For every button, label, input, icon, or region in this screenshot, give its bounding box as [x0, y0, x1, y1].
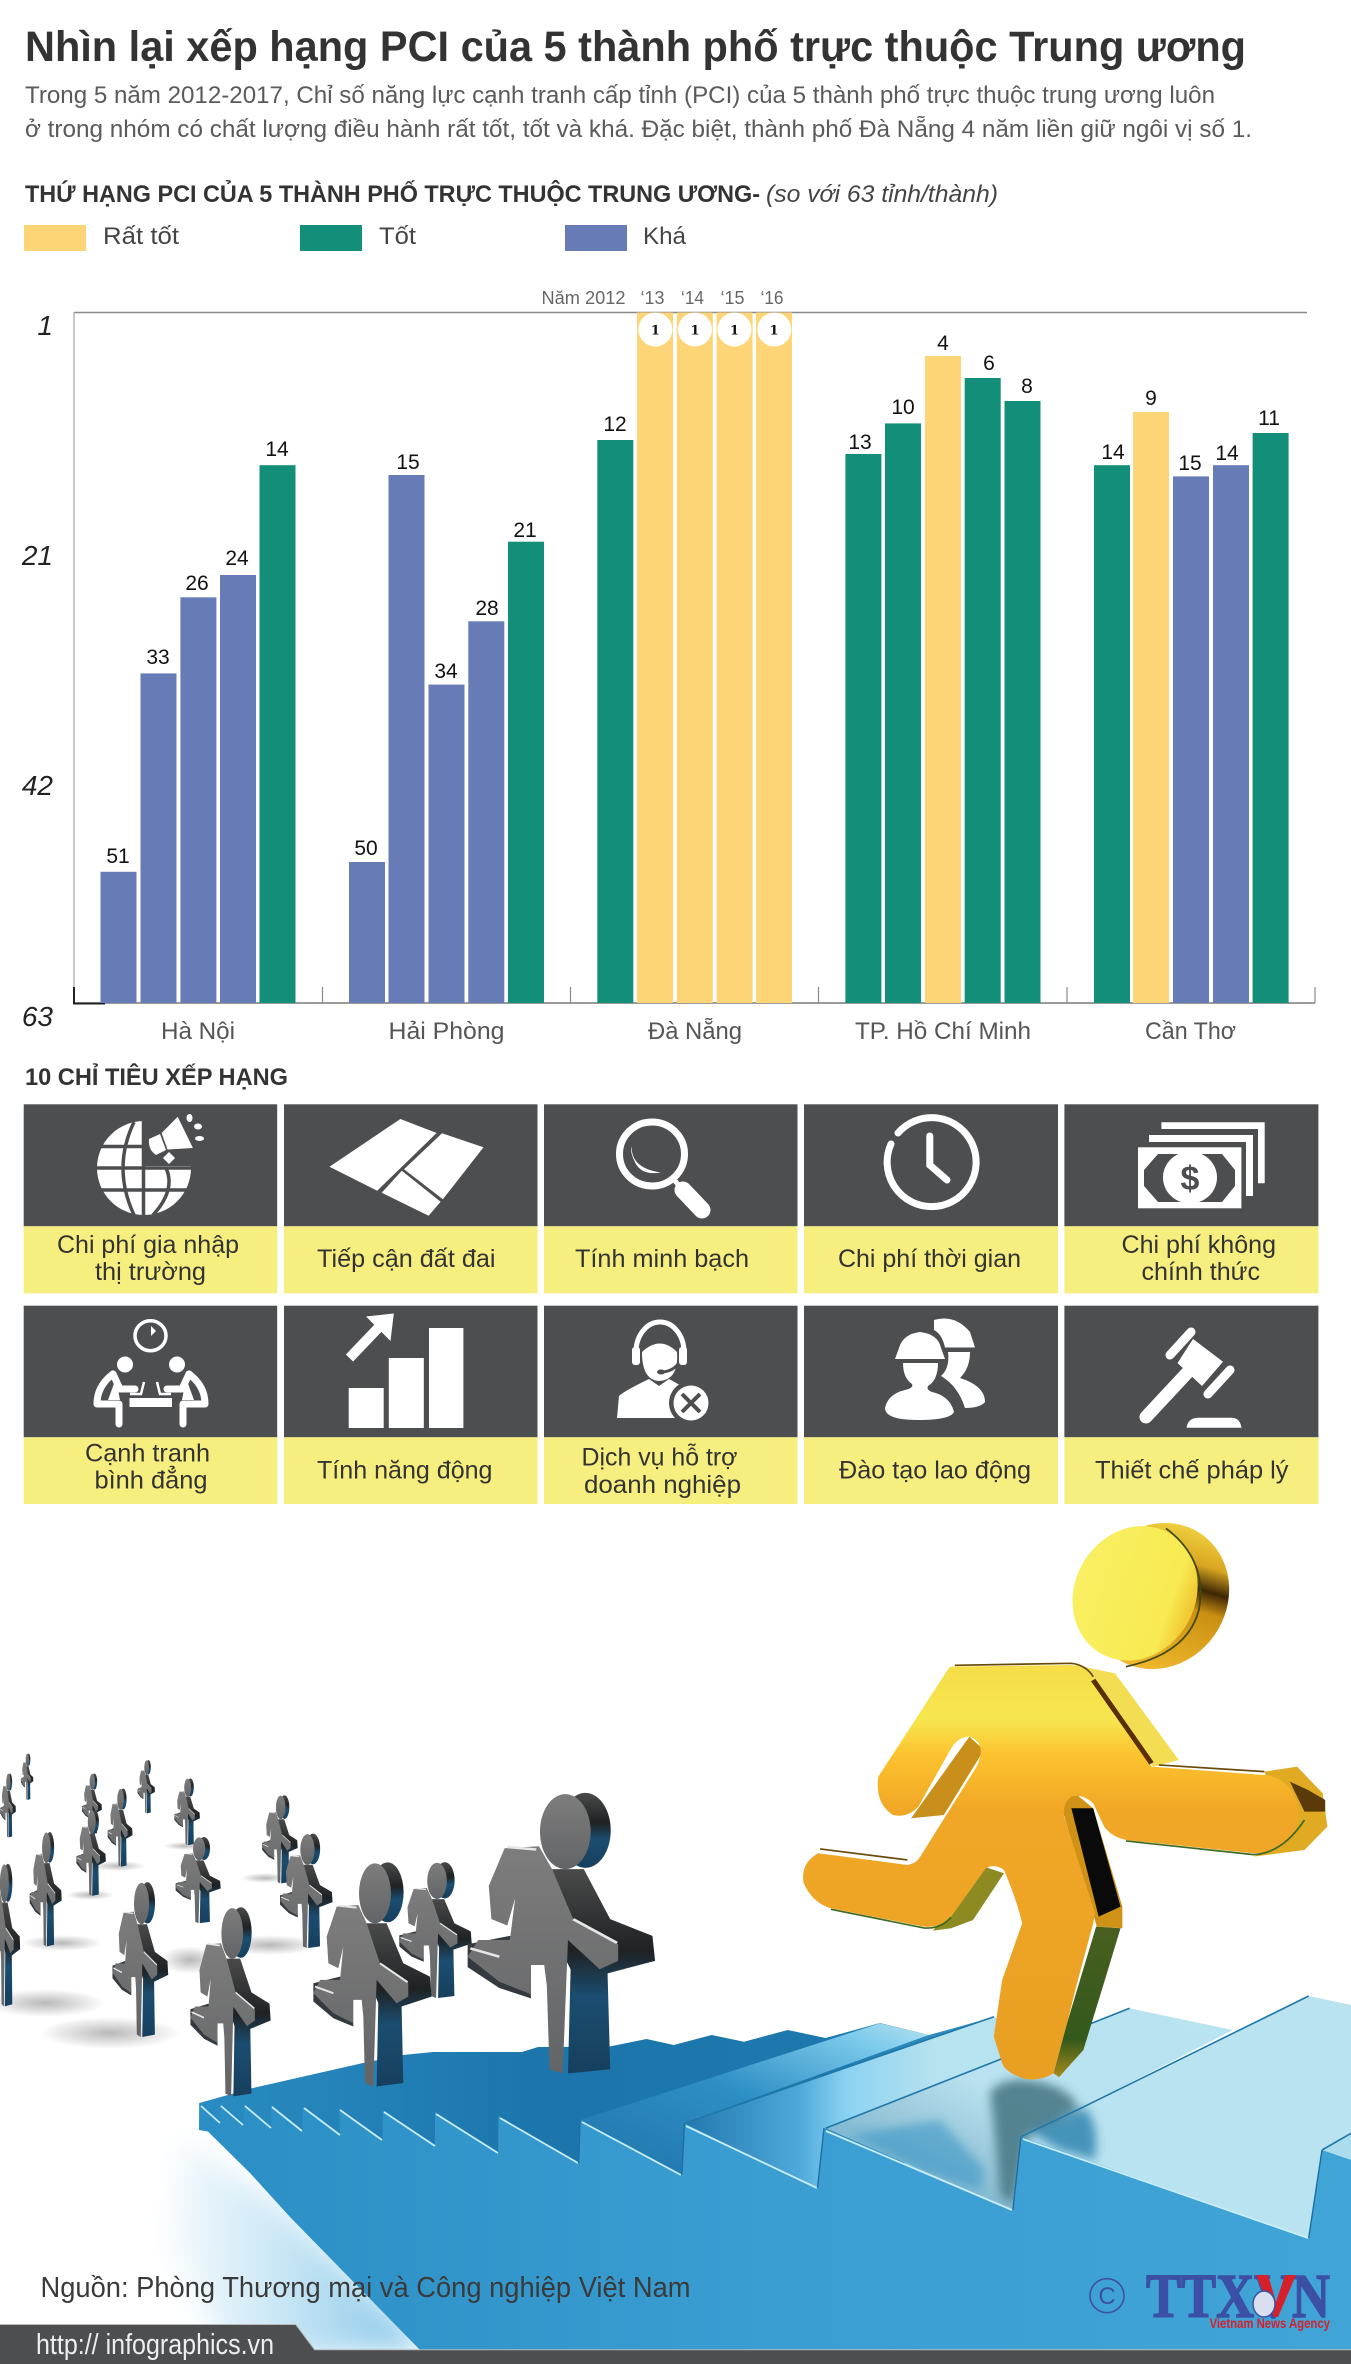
- bars: Cần Thơ: 15: [1178, 452, 1202, 475]
- label: [57, 1231, 239, 1286]
- bars: Đà Nẵng: [597, 312, 792, 1045]
- year labels: [542, 288, 784, 308]
- reflection of runner foot: [850, 2080, 1096, 2205]
- bars: Đà Nẵng: 1: [730, 324, 739, 338]
- illustration: gold runner: [803, 1506, 1327, 2079]
- bars: TP. Hồ Chí Minh: 4: [937, 332, 949, 355]
- intro paragraph: [25, 82, 1252, 143]
- icon: rising bars and arrow: [349, 1314, 463, 1428]
- label: Đào tạo lao động: [839, 1456, 1031, 1484]
- year labels: Năm 2012: [542, 288, 626, 308]
- bars: Đà Nẵng: 1: [690, 324, 700, 338]
- card: dynamism: [284, 1306, 538, 1504]
- logo: TTXVN: C: [1098, 2283, 1116, 2310]
- tread 2: [580, 2023, 929, 2175]
- footer bar: [0, 2324, 1351, 2364]
- icon: land plots: [330, 1119, 484, 1216]
- card: fair competition: [24, 1306, 277, 1504]
- title: Nhìn lại xếp hạng PCI của 5 thành phố trực thuộc Trung ương: [25, 23, 1246, 71]
- icon: banknotes: $: [1181, 1160, 1200, 1198]
- bars: Hải Phòng: 15: [396, 451, 420, 474]
- y axis labels: 1: [37, 310, 53, 341]
- card: market entry cost: [24, 1104, 277, 1293]
- bars: TP. Hồ Chí Minh: 10: [891, 396, 915, 419]
- legend: Khá: [643, 223, 687, 250]
- year labels: ‘15: [720, 288, 744, 308]
- tread 3: [684, 2017, 1043, 2188]
- dark edge highlights: [820, 1663, 1264, 1860]
- legend: Rất tốt: [103, 223, 179, 250]
- icon: support agent with tools: [617, 1322, 713, 1425]
- card: business support: [544, 1306, 798, 1504]
- bars: Hà Nội: 14: [265, 438, 289, 461]
- bars: Cần Thơ: 14: [1101, 441, 1125, 464]
- bars: Hải Phòng: Hải Phòng: [388, 1018, 504, 1045]
- label: Chi phí không: [1122, 1231, 1276, 1259]
- bars: Hải Phòng: 28: [475, 597, 499, 620]
- bars: Đà Nẵng: 1: [769, 324, 779, 338]
- y axis labels: 63: [22, 1001, 53, 1032]
- chart heading: THỨ HẠNG PCI CỦA 5 THÀNH PHỐ TRỰC THUỘC TRUNG ƯƠNG-: [25, 179, 760, 208]
- illustration: front grey runners on stairs: [190, 1793, 655, 2096]
- chart heading: (so với 63 tỉnh/thành): [766, 181, 998, 208]
- icon: two people at a table with clock: [97, 1321, 205, 1424]
- bars: Hà Nội: [100, 438, 296, 1045]
- icon: gavel: [1146, 1332, 1242, 1428]
- y axis labels: 21: [21, 540, 53, 571]
- year labels: ‘13: [640, 288, 664, 308]
- label: doanh nghiệp: [584, 1471, 741, 1499]
- bars: Hải Phòng: [349, 451, 544, 1045]
- illustration: grey runners crowd: [0, 1753, 472, 2037]
- y axis labels: 42: [22, 770, 53, 801]
- bars: Đà Nẵng: Đà Nẵng: [648, 1017, 742, 1045]
- bars: Cần Thơ: [1094, 387, 1289, 1045]
- bars: Hà Nội: 26: [185, 572, 209, 595]
- card: informal charges: [1064, 1104, 1318, 1293]
- tread 4: [826, 2008, 1233, 2210]
- y axis labels: [21, 310, 53, 1032]
- nose highlights: [201, 2106, 1308, 2238]
- illustration: blue stairs: [199, 1996, 1351, 2352]
- label: [85, 1440, 210, 1494]
- bars: Hải Phòng: 34: [434, 660, 458, 683]
- year labels: ‘14: [681, 288, 704, 308]
- label: Tiếp cận đất đai: [317, 1245, 496, 1273]
- bars: Hải Phòng: 21: [513, 519, 537, 542]
- icon: globe and megaphone: [92, 1114, 204, 1218]
- intro paragraph: Trong 5 năm 2012-2017, Chỉ số năng lực cạnh tranh cấp tỉnh (PCI) của 5 thành phố trực thuộc trung ương luôn: [25, 82, 1215, 109]
- illustration: blue fade beside stairs: [170, 2140, 430, 2360]
- legend: [24, 223, 687, 251]
- bars: Cần Thơ: Cần Thơ: [1145, 1018, 1236, 1045]
- label: thị trường: [95, 1258, 206, 1286]
- heading: 10 indicators: 10 CHỈ TIÊU XẾP HẠNG: [25, 1062, 288, 1091]
- legend: Tốt: [379, 223, 416, 250]
- bars: Hà Nội: 51: [106, 845, 130, 868]
- front face: [199, 2103, 1351, 2352]
- bars: Cần Thơ: 9: [1145, 387, 1157, 410]
- bars: TP. Hồ Chí Minh: TP. Hồ Chí Minh: [855, 1018, 1031, 1045]
- bars: Hà Nội: 24: [225, 547, 249, 570]
- card: legal institutions: [1064, 1306, 1318, 1504]
- bars: Đà Nẵng: 1: [651, 324, 660, 338]
- intro paragraph: ở trong nhóm có chất lượng điều hành rất tốt, tốt và khá. Đặc biệt, thành phố Đà Nẵng 4 năm liền giữ ngôi vị số 1.: [25, 115, 1252, 143]
- icon: banknotes: [1138, 1122, 1265, 1208]
- body edge extrusion: [1075, 1665, 1179, 1767]
- label: chính thức: [1142, 1258, 1260, 1286]
- label: Tính minh bạch: [575, 1245, 749, 1273]
- label: bình đẳng: [94, 1464, 208, 1494]
- bars: TP. Hồ Chí Minh: [845, 332, 1040, 1045]
- label: [1122, 1231, 1276, 1286]
- icon: two workers in hard hats: [885, 1318, 985, 1420]
- axes: [74, 312, 1315, 1004]
- bars: Cần Thơ: 11: [1258, 407, 1280, 430]
- tread 5: [1021, 1996, 1351, 2238]
- bars: Đà Nẵng: 12: [603, 413, 627, 436]
- illustration: shadows under crowd: [0, 1842, 320, 2049]
- card: time cost: [804, 1104, 1058, 1293]
- bars: Cần Thơ: 14: [1215, 442, 1239, 465]
- bars: Hà Nội: 33: [146, 646, 170, 669]
- label: Chi phí thời gian: [838, 1245, 1021, 1273]
- icon: clock: [887, 1118, 976, 1207]
- card: labour training: [804, 1306, 1058, 1504]
- card: transparency: [544, 1104, 798, 1293]
- body front: [803, 1665, 1298, 2079]
- bars: TP. Hồ Chí Minh: 13: [848, 431, 872, 454]
- label: Thiết chế pháp lý: [1095, 1456, 1289, 1484]
- head: [1054, 1506, 1250, 1686]
- bars: TP. Hồ Chí Minh: 8: [1021, 375, 1033, 398]
- year labels: ‘16: [760, 288, 784, 308]
- label: Dịch vụ hỗ trợ: [582, 1442, 738, 1472]
- card: land access: [284, 1104, 538, 1293]
- bars: Hà Nội: Hà Nội: [161, 1018, 235, 1045]
- bars: TP. Hồ Chí Minh: 6: [983, 352, 995, 375]
- label: Chi phí gia nhập: [57, 1231, 239, 1259]
- bar chart: PCI rank: [21, 288, 1315, 1045]
- url: http:// infographics.vn: [36, 2329, 274, 2361]
- bars: Hải Phòng: 50: [354, 837, 378, 860]
- source line: Nguồn: Phòng Thương mại và Công nghiệp Việt Nam: [40, 2272, 690, 2304]
- tread 6: [1322, 2133, 1351, 2162]
- back of stairs: [199, 2017, 1030, 2200]
- stair edges: [684, 1996, 1351, 2150]
- label: Cạnh tranh: [85, 1440, 210, 1468]
- label: [582, 1442, 741, 1499]
- label: Tính năng động: [317, 1456, 492, 1484]
- icon: magnifier: [620, 1122, 702, 1210]
